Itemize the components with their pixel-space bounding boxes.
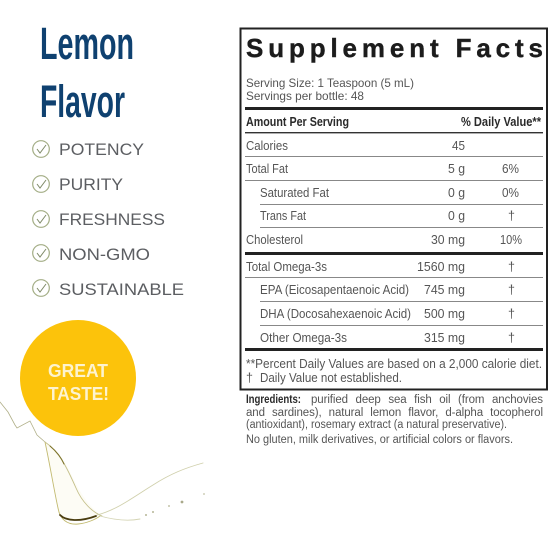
item: purity <box>33 175 123 194</box>
row: cholesterol: 10% <box>500 233 522 247</box>
row: trans fat: 0 g <box>448 209 465 223</box>
row: saturated fat: 0% <box>502 186 519 200</box>
ingredients text: Ingredients: <box>246 394 301 406</box>
title: Lemon Flavor: Flavor <box>40 76 125 127</box>
serving information: Servings per bottle: 48 <box>246 89 364 103</box>
row: calories: Calories <box>246 139 288 153</box>
row: other omega-3s: Other Omega-3s <box>260 331 347 345</box>
row: trans fat <box>260 209 515 223</box>
row: calories: 45 <box>452 139 465 153</box>
row: other omega-3s: 315 mg <box>424 331 465 345</box>
row: cholesterol: 30 mg <box>431 233 465 247</box>
badge: great taste <box>20 320 136 436</box>
panel: supplement facts <box>240 28 547 390</box>
footnotes: Daily Value not established. <box>260 371 402 385</box>
row: calories <box>246 139 465 153</box>
row: saturated fat: 0 g <box>448 186 465 200</box>
row: dha: 500 mg <box>424 307 465 321</box>
item: purity: PURITY <box>59 175 123 194</box>
ingredients text: and sardines), natural lemon flavor, d-alpha tocopherol <box>246 407 543 419</box>
row: total omega-3s: Total Omega-3s <box>246 260 327 274</box>
title: Lemon Flavor: Lemon <box>40 18 134 69</box>
badge: great taste: GREAT <box>48 361 108 381</box>
ingredients text: purified deep sea fish oil (from anchovies <box>311 394 543 406</box>
row: other omega-3s: † <box>508 331 515 345</box>
row: total fat: Total Fat <box>246 162 288 176</box>
heading: supplement facts: Supplement Facts <box>246 33 543 63</box>
ingredients text: (antioxidant), rosemary extract (a natural preservative). <box>246 419 507 431</box>
row: total fat: 5 g <box>448 162 465 176</box>
row: total fat <box>246 162 519 176</box>
row: epa: 745 mg <box>424 283 465 297</box>
row: epa <box>260 283 515 297</box>
row: other omega-3s <box>260 331 515 345</box>
row: dha: † <box>508 307 515 321</box>
ingredients text: No gluten, milk derivatives, or artificial colors or flavors. <box>246 434 513 446</box>
row: saturated fat <box>260 186 519 200</box>
row: trans fat: † <box>508 209 515 223</box>
serving information: Serving Size: 1 Teaspoon (5 mL) <box>246 76 414 90</box>
row: epa: † <box>508 283 515 297</box>
row: trans fat: Trans Fat <box>260 209 306 223</box>
row: total omega-3s: 1560 mg <box>417 260 465 274</box>
row: total omega-3s <box>246 260 515 274</box>
table header: % Daily Value** <box>461 115 541 129</box>
footnotes <box>246 357 542 385</box>
feature checklist <box>33 140 184 299</box>
title: Lemon Flavor <box>40 18 134 127</box>
row: epa: EPA (Eicosapentaenoic Acid) <box>260 283 409 297</box>
row: cholesterol: Cholesterol <box>246 233 303 247</box>
footnotes: † <box>246 371 253 385</box>
row: cholesterol <box>246 233 522 247</box>
row: dha: DHA (Docosahexaenoic Acid) <box>260 307 411 321</box>
item: non-gmo: NON-GMO <box>59 245 150 264</box>
table header: Amount Per Serving <box>246 115 349 129</box>
ingredients text <box>246 394 543 446</box>
row: saturated fat: Saturated Fat <box>260 186 329 200</box>
badge: great taste: TASTE! <box>48 384 109 404</box>
illustration: oil splash <box>0 402 205 524</box>
row: dha <box>260 307 515 321</box>
row: total omega-3s: † <box>508 260 515 274</box>
item: freshness: FRESHNESS <box>59 210 165 229</box>
item: potency: POTENCY <box>59 140 144 159</box>
row: total fat: 6% <box>502 162 519 176</box>
serving information <box>246 76 414 103</box>
table header <box>246 115 541 129</box>
item: sustainable: SUSTAINABLE <box>59 280 184 299</box>
